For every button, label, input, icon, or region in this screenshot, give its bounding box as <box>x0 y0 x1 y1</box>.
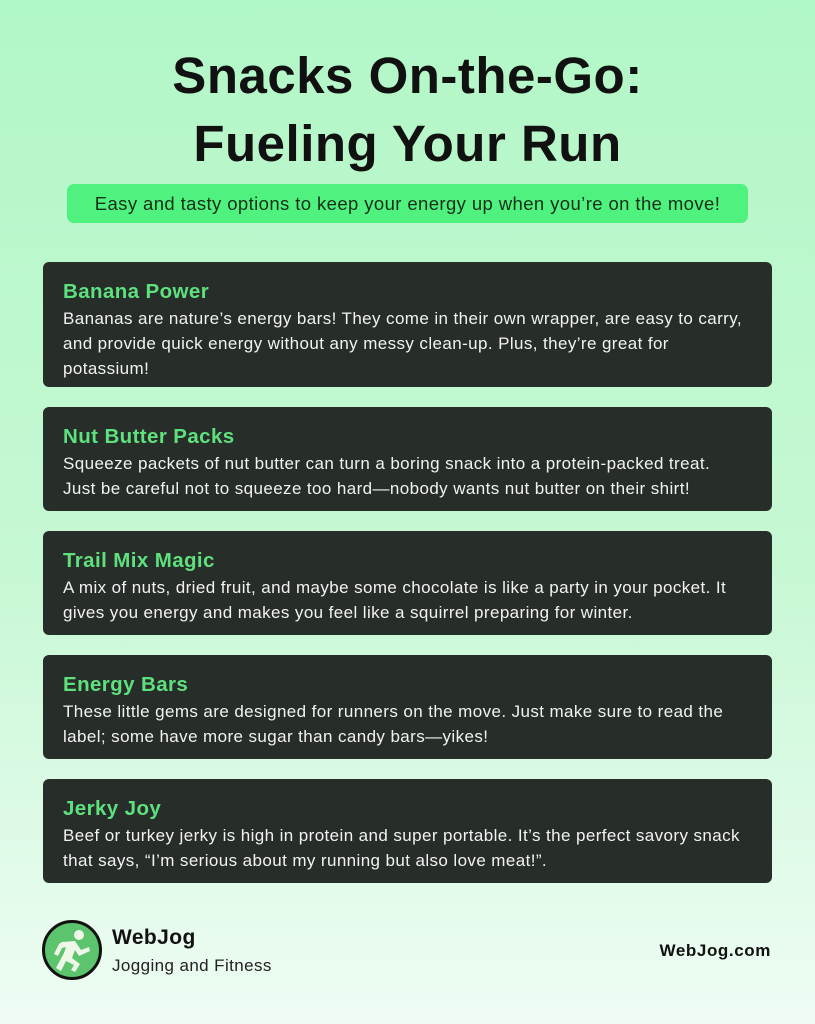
footer brand text: WebJog <box>112 926 196 949</box>
card: Trail Mix Magic: gives you energy and makes you feel like a squirrel preparing for winter. <box>63 603 633 622</box>
card: Nut Butter Packs: Squeeze packets of nut butter can turn a boring snack into a protein-packed treat. <box>63 454 710 473</box>
card: Nut Butter Packs <box>43 407 772 511</box>
subtitle pill: Easy and tasty options to keep your energy up when you’re on the move! <box>95 193 720 214</box>
footer logo <box>42 920 102 980</box>
card: Energy Bars: label; some have more sugar than candy bars—yikes! <box>63 727 488 746</box>
card: Banana Power: and provide quick energy without any messy clean-up. Plus, they’re great for <box>63 334 669 353</box>
card: Energy Bars: These little gems are designed for runners on the move. Just make sure to read the <box>63 702 723 721</box>
title: Fueling Your Run <box>193 115 622 172</box>
card: Energy Bars: Energy Bars <box>63 673 188 696</box>
card: Banana Power: Bananas are nature’s energy bars! They come in their own wrapper, are easy to carry, <box>63 309 742 328</box>
card: Banana Power: potassium! <box>63 359 149 378</box>
card: Banana Power: Banana Power <box>63 280 209 303</box>
card: Jerky Joy: Beef or turkey jerky is high in protein and super portable. It’s the perfect savory snack <box>63 826 740 845</box>
footer url: WebJog.com <box>660 941 771 960</box>
title: Snacks On-the-Go: <box>172 47 643 104</box>
card: Nut Butter Packs: Just be careful not to squeeze too hard—nobody wants nut butter on their shirt! <box>63 479 690 498</box>
card: Jerky Joy <box>43 779 772 883</box>
card: Jerky Joy: that says, “I’m serious about my running but also love meat!”. <box>63 851 547 870</box>
subtitle pill <box>67 184 748 223</box>
card: Energy Bars <box>43 655 772 759</box>
card: Nut Butter Packs: Nut Butter Packs <box>63 425 235 448</box>
footer brand text: Jogging and Fitness <box>112 956 272 975</box>
footer brand text <box>112 926 272 975</box>
card: Banana Power <box>43 262 772 387</box>
card: Trail Mix Magic: A mix of nuts, dried fruit, and maybe some chocolate is like a party in your pocket. It <box>63 578 726 597</box>
card: Trail Mix Magic: Trail Mix Magic <box>63 549 215 572</box>
card: Trail Mix Magic <box>43 531 772 635</box>
title <box>172 47 643 172</box>
card: Jerky Joy: Jerky Joy <box>63 797 161 820</box>
